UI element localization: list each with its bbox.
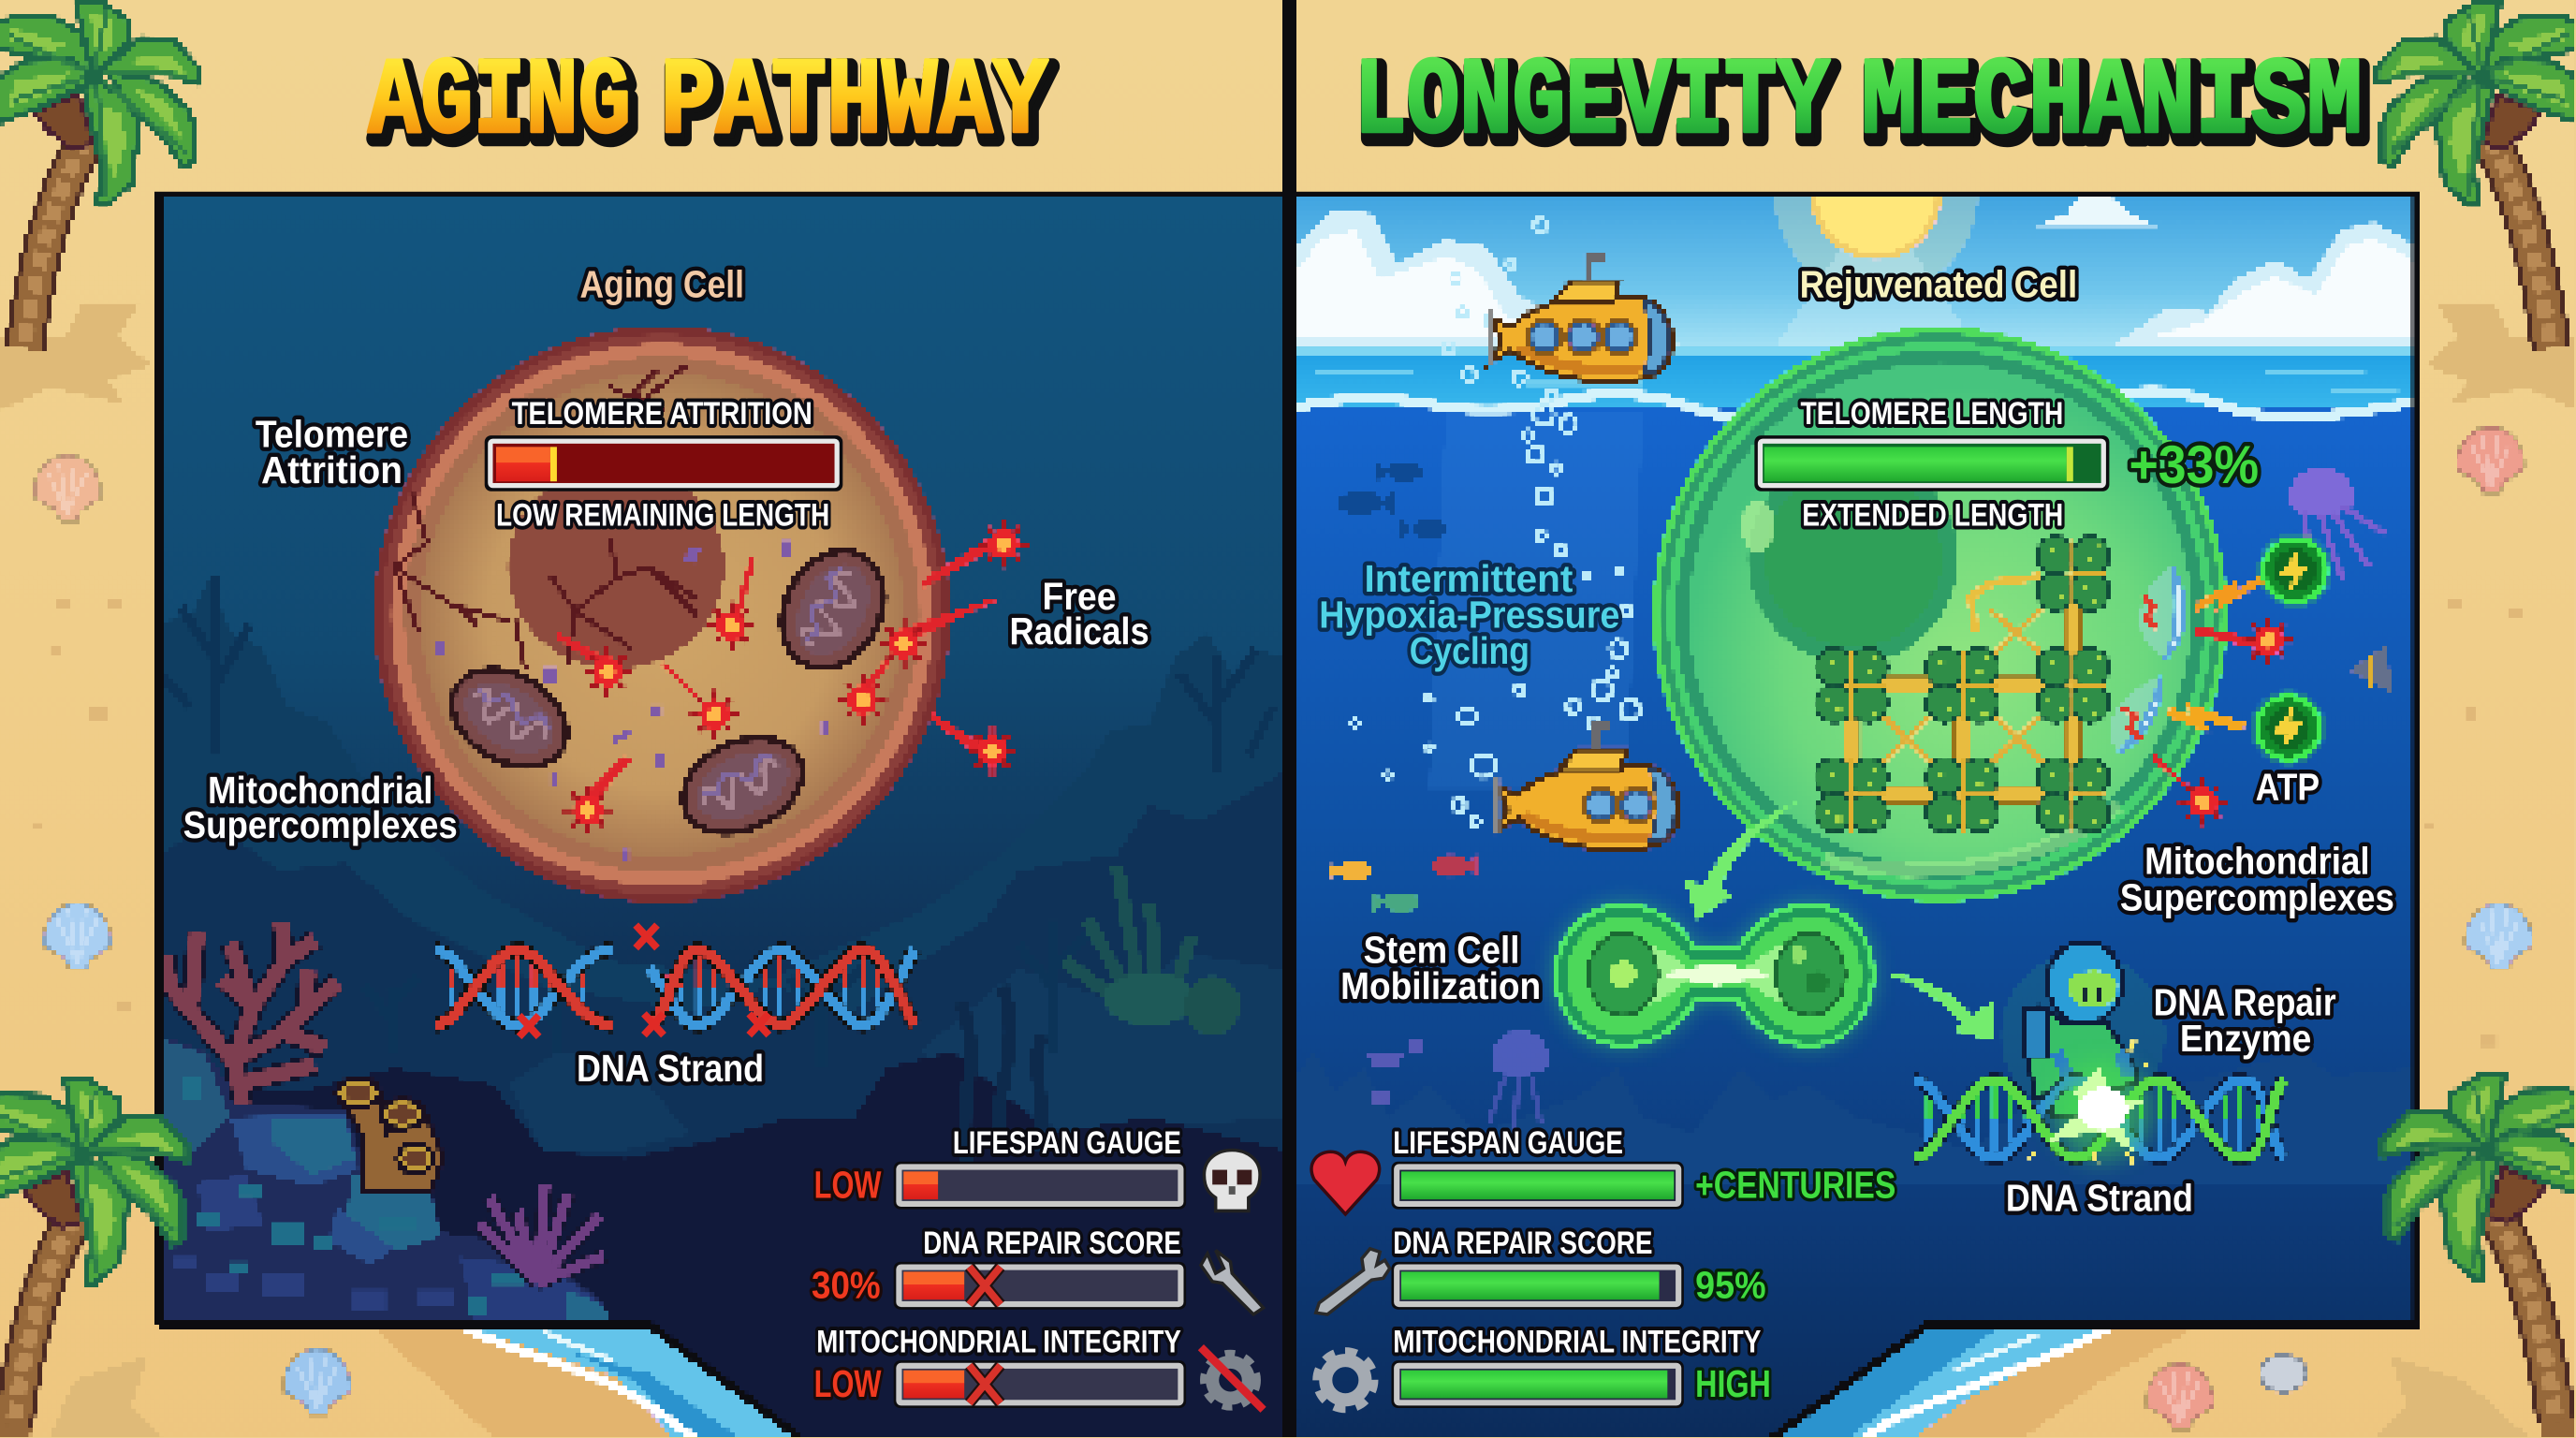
aging cell — [378, 330, 1029, 899]
title: longevity mechanism: LONGEVITY — [1358, 48, 1836, 170]
gauge: longevity mitochondrial integrity: MITOCHONDRIAL INTEGRITY — [1393, 1324, 1761, 1359]
dark blue rocks — [159, 1035, 611, 1325]
label: rejuvenated cell: Rejuvenated Cell — [1800, 263, 2077, 306]
label: free radicals: Radicals — [1009, 609, 1149, 653]
shell: blue right — [2466, 903, 2532, 969]
gauge: aging lifespan: LIFESPAN GAUGE — [953, 1125, 1181, 1161]
label: aging cell: Aging Cell — [580, 263, 744, 306]
label: DNA repair enzyme: Enzyme — [2180, 1017, 2311, 1060]
label: intermittent hypoxia-pressure cycling: Hypoxia-Pressure — [1319, 593, 1619, 636]
label: intermittent hypoxia-pressure cycling: Cycling — [1410, 629, 1530, 672]
title: longevity mechanism: MECHANISM — [1861, 41, 2363, 164]
bubbles — [1352, 218, 1639, 827]
clouds — [1296, 198, 2417, 348]
icon: heart — [1311, 1152, 1380, 1214]
label: telomere attrition: Telomere — [256, 412, 408, 455]
gauge: longevity DNA repair: DNA REPAIR SCORE — [1393, 1225, 1653, 1261]
palm bottom right — [2382, 1075, 2576, 1438]
label: intermittent hypoxia-pressure cycling — [1319, 557, 1619, 672]
label: DNA strand left: DNA Strand — [577, 1047, 764, 1090]
shields — [2109, 566, 2185, 753]
gauge: aging mitochondrial integrity — [814, 1324, 1186, 1408]
title: aging pathway: AGING — [368, 41, 631, 164]
gauge: aging DNA repair: DNA REPAIR SCORE — [923, 1225, 1181, 1261]
label: mitochondrial supercomplexes left — [183, 769, 458, 846]
sky — [1296, 194, 2417, 359]
stem cell mobilization — [1556, 905, 1873, 1045]
gauge: longevity lifespan: LIFESPAN GAUGE — [1393, 1125, 1623, 1161]
label: intermittent hypoxia-pressure cycling: Intermittent — [1365, 557, 1573, 600]
label: mitochondrial supercomplexes right — [2120, 840, 2394, 918]
angel fish — [2349, 646, 2393, 694]
label: mitochondrial supercomplexes left: Supercomplexes — [183, 803, 458, 846]
label: mitochondrial supercomplexes right: Mitochondrial — [2144, 840, 2370, 883]
palm top left — [0, 2, 198, 348]
icon: gear — [1318, 1352, 1373, 1408]
label: telomere attrition — [256, 412, 408, 492]
arrow: stem cell to repair — [1882, 973, 1996, 1042]
gauge: longevity lifespan: +CENTURIES — [1695, 1163, 1895, 1206]
light shaft — [1429, 411, 1643, 788]
shell: grey pebble — [2261, 1356, 2306, 1391]
deep water — [1296, 407, 2417, 1438]
label: free radicals: Free — [1043, 575, 1117, 618]
icon: skull — [1204, 1150, 1260, 1211]
callout: +33%: +33% — [2129, 435, 2259, 495]
DNA damage crosses — [520, 925, 768, 1036]
gauge: longevity DNA repair — [1391, 1225, 1766, 1310]
icon: broken gear — [1201, 1347, 1264, 1410]
gauge: aging DNA repair: 30% — [812, 1263, 881, 1306]
nucleus — [505, 491, 725, 669]
faint coral fans — [164, 576, 1278, 996]
gauge: longevity mitochondrial integrity — [1391, 1324, 1771, 1408]
panel: aging pathway scene — [159, 194, 1283, 1438]
label: telomere attrition: Attrition — [261, 448, 402, 492]
telomere length meter: TELOMERE LENGTH — [1800, 396, 2063, 432]
panel: longevity mechanism scene — [1296, 92, 2417, 1438]
gauge: aging mitochondrial integrity: LOW — [814, 1362, 882, 1405]
wave foam — [1296, 391, 2417, 418]
icon: broken wrench — [1201, 1251, 1264, 1314]
icon: wrench — [1316, 1249, 1390, 1314]
damaged DNA strand — [435, 949, 915, 1025]
green seaweed — [1064, 866, 1240, 1035]
background reef silhouettes — [164, 580, 1282, 1011]
gauge: aging lifespan: LOW — [814, 1163, 882, 1206]
title: longevity mechanism: LONGEVITY — [1354, 41, 1830, 164]
jellyfish right — [2289, 468, 2385, 579]
rejuvenated cell — [1656, 330, 2224, 899]
label: free radicals — [1009, 575, 1149, 653]
shell: blue bottom — [284, 1349, 350, 1415]
arrow: cell to stem cell — [1684, 801, 1797, 920]
center divider — [1281, 0, 1296, 1438]
label: DNA repair enzyme: DNA Repair — [2154, 981, 2336, 1024]
repaired DNA strand — [1914, 1079, 2283, 1158]
shell: pink bottom — [2146, 1364, 2214, 1430]
ATP bolts and radicals — [2122, 533, 2333, 827]
gauge: aging mitochondrial integrity: MITOCHONDRIAL INTEGRITY — [816, 1324, 1181, 1359]
supercomplex lattice — [1815, 536, 2109, 832]
label: DNA strand right: DNA Strand — [2006, 1176, 2193, 1219]
shell: pink right — [2457, 427, 2524, 492]
label: mitochondrial supercomplexes right: Supercomplexes — [2120, 875, 2394, 918]
gauge: longevity lifespan — [1391, 1125, 1895, 1210]
sponge coral — [337, 1078, 444, 1191]
cracks — [394, 365, 698, 670]
panel borders — [159, 194, 2417, 1438]
DNA repair enzyme figure — [2001, 942, 2165, 1117]
telomere length meter — [1754, 396, 2109, 534]
fish silhouettes — [1338, 462, 1447, 539]
gauge: aging lifespan — [814, 1125, 1186, 1210]
label: ATP: ATP — [2256, 766, 2320, 809]
mitochondria — [777, 548, 889, 669]
purple granules — [433, 540, 829, 862]
palm top right — [2377, 2, 2576, 348]
sun — [1771, 92, 1982, 353]
gauge: longevity DNA repair: 95% — [1695, 1263, 1766, 1306]
jellyfish background — [1367, 1030, 1549, 1130]
title: aging pathway: PATHWAY — [666, 48, 1053, 170]
palm bottom left — [0, 1079, 187, 1438]
repair spark — [2028, 1038, 2150, 1164]
sea surface band — [1296, 348, 2417, 411]
free radicals — [564, 520, 1029, 835]
distant reef — [1296, 1051, 2417, 1183]
label: stem cell mobilization: Stem Cell — [1364, 928, 1519, 971]
submarine top — [1490, 258, 1673, 382]
shell: blue left — [44, 903, 110, 969]
title: aging pathway — [368, 41, 1053, 170]
submarine bottom — [1497, 726, 1679, 850]
nucleus — [1748, 453, 1958, 664]
gauge: aging DNA repair — [812, 1225, 1186, 1310]
small fish — [1327, 855, 1477, 912]
shoreline: left beach water — [370, 1325, 822, 1438]
label: stem cell mobilization: Mobilization — [1340, 964, 1541, 1007]
gauge: longevity mitochondrial integrity: HIGH — [1695, 1362, 1771, 1405]
label: stem cell mobilization — [1340, 928, 1541, 1007]
telomere attrition meter: LOW REMAINING LENGTH — [496, 498, 829, 534]
telomere attrition meter — [485, 396, 842, 534]
red branching coral — [166, 923, 337, 1104]
shoreline: right beach water — [1766, 1325, 2202, 1438]
telomere attrition meter: TELOMERE ATTRITION — [512, 396, 812, 432]
purple coral — [479, 1183, 605, 1284]
title: aging pathway: AGING — [373, 48, 636, 170]
shell: peach left — [34, 455, 101, 521]
title: longevity mechanism — [1354, 41, 2367, 170]
sand specks — [33, 600, 2524, 1047]
title: aging pathway: PATHWAY — [661, 41, 1048, 164]
telomere length meter: EXTENDED LENGTH — [1802, 498, 2063, 534]
label: mitochondrial supercomplexes left: Mitochondrial — [208, 769, 432, 812]
label: DNA repair enzyme — [2154, 981, 2336, 1060]
palm shadows — [0, 302, 2576, 1438]
dark kelp — [961, 986, 1043, 1167]
free radical trails — [555, 534, 1003, 810]
title: longevity mechanism: MECHANISM — [1866, 48, 2367, 170]
